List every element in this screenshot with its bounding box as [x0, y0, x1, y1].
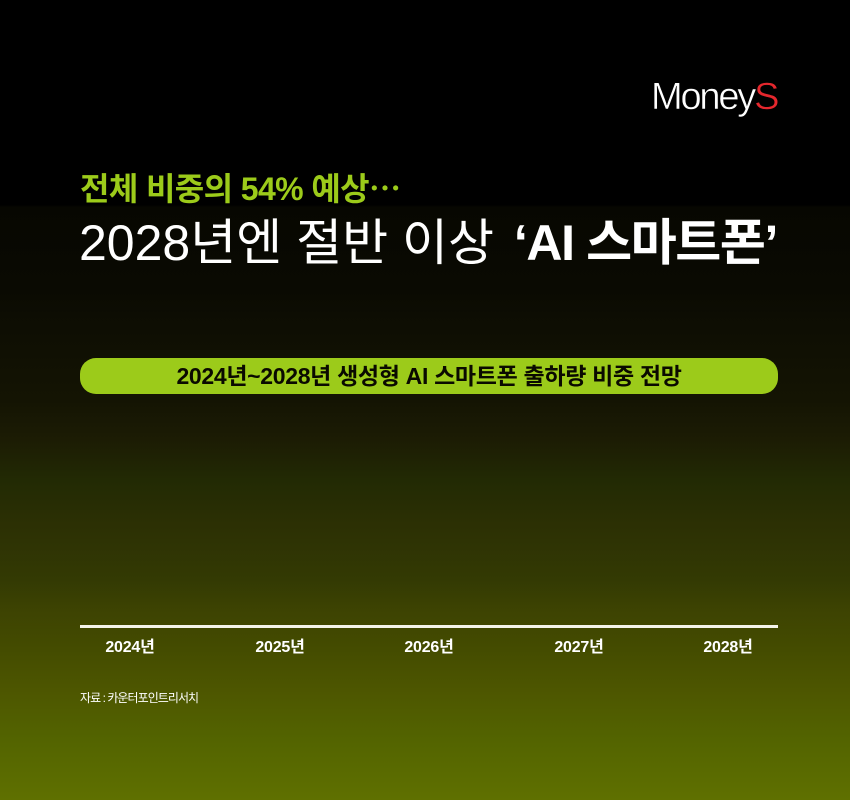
chart axis line [80, 625, 778, 628]
axis label 2028: 2028년 [703, 639, 753, 656]
logo: MoneyS: MoneyS [651, 76, 777, 118]
chart heading pill: 2024년~2028년 생성형 AI 스마트폰 출하량 비중 전망 [176, 363, 682, 389]
axis label 2025: 2025년 [255, 639, 305, 656]
axis label 2026: 2026년 [404, 639, 454, 656]
main title: 2028년엔 절반 이상 ‘AI 스마트폰’ [79, 215, 777, 271]
axis label 2024: 2024년 [105, 639, 155, 656]
axis label 2027: 2027년 [554, 639, 604, 656]
chart heading pill [80, 358, 778, 394]
source note: 자료 : 카운터포인트리서치 [80, 691, 198, 705]
subtitle: 전체 비중의 54% 예상⋯ [80, 171, 400, 207]
